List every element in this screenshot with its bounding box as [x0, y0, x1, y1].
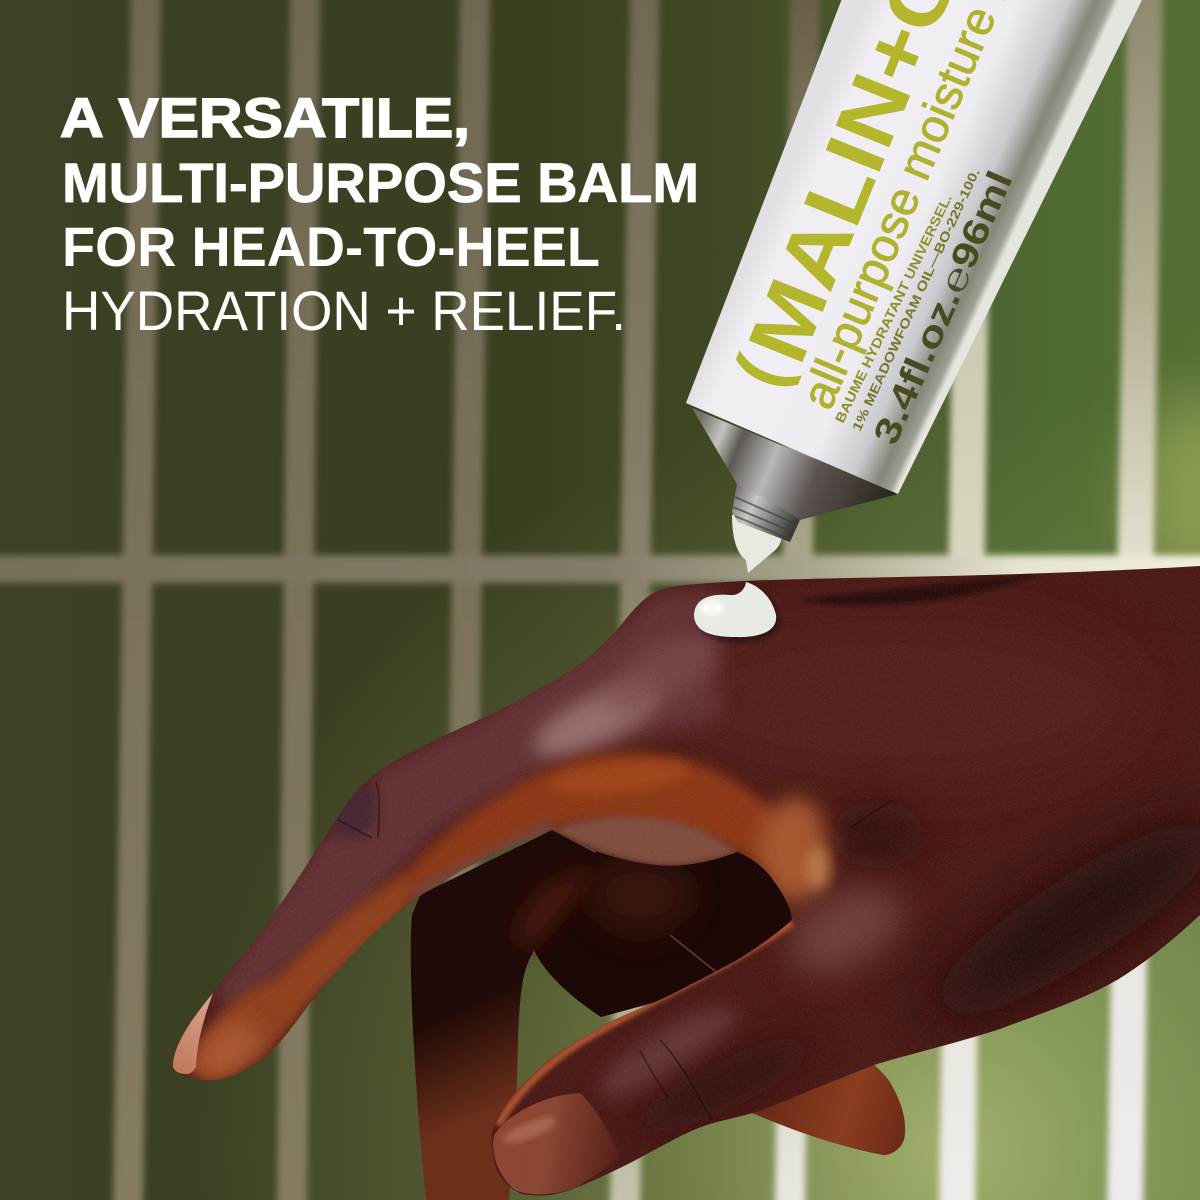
thumb joint hot spot: [806, 846, 830, 890]
heading line 3: FOR HEAD-TO-HEEL: [62, 215, 600, 278]
far fingertip: [750, 1064, 905, 1155]
bright part of band: [554, 758, 688, 795]
tube shoulder: [692, 408, 898, 520]
pale thumb base sheen: [780, 874, 911, 984]
shadowed fingers behind the thumb: [534, 845, 800, 1017]
thumb top rim light: [498, 922, 792, 1125]
pink web of hand: [552, 816, 737, 866]
brand opening parenthesis on tube: (: [720, 346, 803, 398]
dollop highlight: [700, 601, 724, 615]
hand: back of hand, index finger and thumb: [165, 560, 1200, 1200]
heading: balm headline: [60, 86, 699, 342]
balm tube: [686, 0, 1142, 573]
mauve top of index finger: [205, 590, 720, 1010]
heading line 4: HYDRATION + RELIEF.: [62, 279, 626, 342]
shadow right of crease: [832, 801, 924, 869]
lit lower index finger: [185, 875, 412, 1082]
thumb sheen: [598, 1002, 738, 1102]
icon: index fingernail: [173, 993, 213, 1074]
nozzle thread lines: [733, 497, 796, 539]
heading line 1: A VERSATILE,: [60, 86, 470, 149]
top-of-hand tube shadow: [800, 574, 1040, 605]
balm dollop on the hand: [694, 582, 780, 642]
thumb dark underside: [644, 1036, 806, 1134]
balm squeezing from the nozzle: [732, 514, 784, 573]
thumb joint orange crease: [759, 798, 831, 902]
tube threaded nozzle: [732, 484, 800, 542]
heading line 2: MULTI-PURPOSE BALM: [62, 151, 699, 214]
volume on tube: 3.4fl.oz.℮96ml: [865, 165, 1020, 450]
skin sheen on hand: [526, 680, 662, 766]
middle finger side light: [516, 862, 598, 950]
thumbnail highlight: [501, 1112, 559, 1148]
knuckle and thumb creases: [338, 782, 895, 1120]
skin grain: [165, 560, 1200, 1200]
wrist underside shadow: [905, 789, 1200, 1051]
sheen toward dollop: [605, 636, 718, 716]
back of hand warm tone: [723, 638, 1098, 762]
French descriptor on tube: BAUME HYDRATANT UNIVERSEL.: [832, 192, 955, 425]
tube body: [686, 0, 1142, 494]
brown patch on shadowed finger: [590, 859, 690, 931]
fingertip glow: [192, 1019, 262, 1080]
orange sun band across knuckle: [395, 752, 800, 903]
icon: thumbnail: [493, 1093, 619, 1194]
knuckle: [328, 778, 376, 838]
middle finger pointing down: [411, 830, 605, 1200]
underside of index finger, mauve: [412, 826, 552, 898]
ingredient line on tube: 1% MEADOWFOAM OIL—BO-229-100.: [849, 166, 983, 433]
pale streak between shadowed fingers: [670, 935, 720, 975]
